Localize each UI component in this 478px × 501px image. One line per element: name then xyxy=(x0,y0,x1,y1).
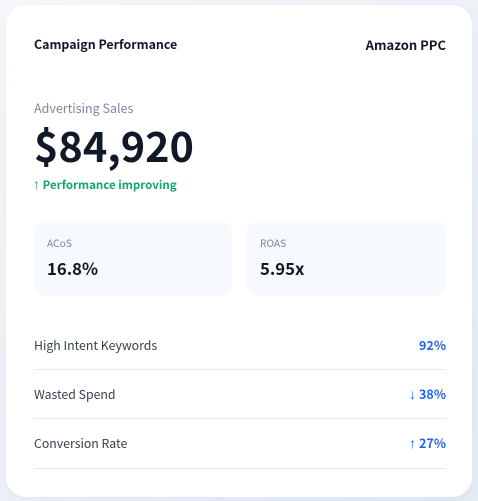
label: advertising sales: Advertising Sales xyxy=(34,98,133,117)
ROAS label: ROAS xyxy=(260,235,286,250)
row value: up 27%: ↑ 27% xyxy=(409,433,446,452)
row label: conversion rate: Conversion Rate xyxy=(34,434,127,452)
big number: sales: $84,920 xyxy=(34,114,194,174)
row label: wasted spend: Wasted Spend xyxy=(34,385,116,403)
heading: amazon ppc: Amazon PPC xyxy=(366,35,446,54)
trend note: ↑ Performance improving xyxy=(33,176,177,193)
ACoS label: ACoS xyxy=(47,235,72,250)
panel: ROAS xyxy=(247,221,446,296)
row value: 92%: 92% xyxy=(419,335,446,354)
row value: down 38%: ↓ 38% xyxy=(409,384,446,403)
ROAS value: 5.95x xyxy=(260,256,304,280)
panel: ACoS xyxy=(34,221,232,296)
heading: campaign performance: Campaign Performance xyxy=(34,35,177,53)
row label: high intent keywords: High Intent Keywords xyxy=(34,336,157,354)
ACoS value: 16.8% xyxy=(47,256,98,280)
